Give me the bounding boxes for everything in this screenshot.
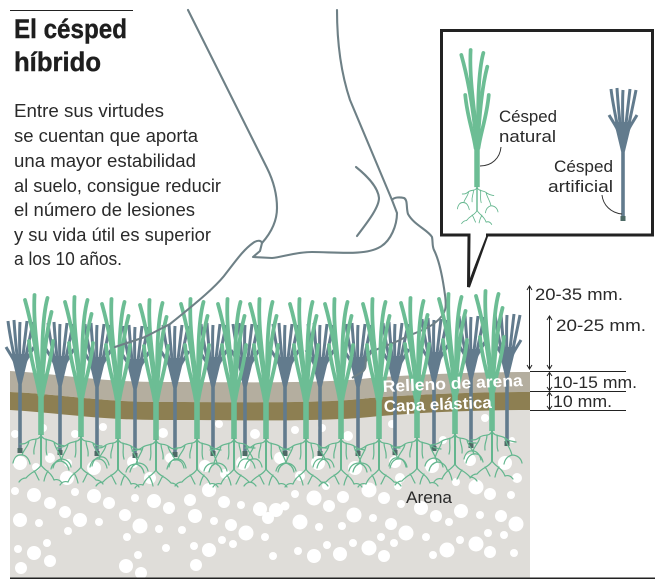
measure labels: 10 mm. [553,392,612,411]
layer label: elastic layer: Capa elástica [383,394,493,416]
body text: a los 10 años. [14,248,122,269]
panel: inset comparison [442,30,652,287]
icon: natural grass [457,50,498,224]
bottom rule [10,578,655,579]
label: natural grass: natural [499,127,556,146]
natural grass plants [13,291,522,488]
title rule [10,10,133,11]
leader: artificial grass [602,195,622,214]
measure labels: 20-25 mm. [556,316,646,335]
body text [14,100,221,269]
body text: se cuentan que aporta [14,125,199,146]
elastic layer [10,392,530,420]
layer label: sand infill: Relleno de arena [382,372,524,396]
title: El césped [14,14,127,44]
measure labels [535,285,646,411]
panel: soil cross-section [10,371,530,579]
sand pebbles [11,414,524,579]
pointer opening [470,232,486,275]
icon: artificial grass [609,88,637,221]
artificial grass plants [6,313,521,458]
label: artificial grass: Césped [554,157,613,176]
body text: el número de lesiones [14,199,195,220]
title: híbrido [14,47,101,77]
body text: Entre sus virtudes [14,100,164,121]
inset box with pointer [442,30,652,287]
label: artificial grass: artificial [548,177,613,196]
leader: natural grass [480,147,501,166]
foot outline [115,10,445,347]
label: natural grass: Césped [499,107,557,126]
layer label: sand: Arena [406,488,453,507]
sand infill layer [10,371,530,402]
body text: y su vida útil es superior [14,224,211,245]
lower foot outline behind grass [352,295,446,378]
label: artificial grass [548,157,613,196]
body text: una mayor estabilidad [14,150,196,171]
title [14,14,127,77]
measurement scale [527,285,646,411]
measure labels: 20-35 mm. [535,285,623,304]
label: natural grass [499,107,557,146]
sand layer [10,400,530,578]
body text: al suelo, consigue reducir [14,175,221,196]
measure labels: 10-15 mm. [553,373,637,392]
